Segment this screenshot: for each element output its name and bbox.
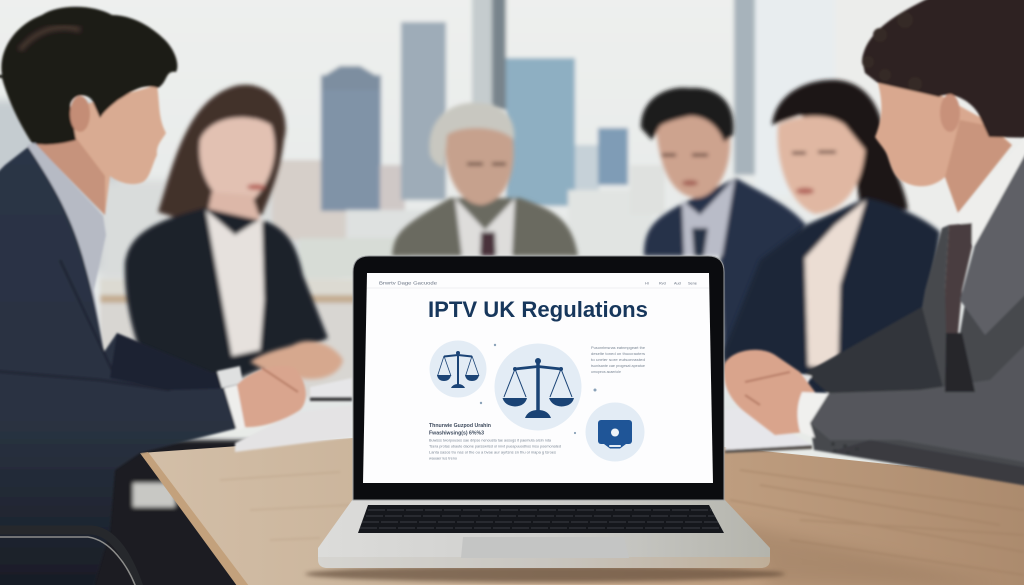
screen subheading: Thnurwie Guzpod Urahin [429,423,491,429]
icon: small scales [430,340,486,398]
conference table [140,438,1024,585]
screen page: Rvd [659,282,666,286]
decorative dots [480,344,596,434]
screen page [363,273,713,483]
laptop [318,256,770,568]
person: woman right [724,80,940,400]
person: man rear right [641,88,806,360]
screen body text lower left: Buwsss tworpouses sae dripse nenousta tae aosugs it paemuta arsin nda [429,438,552,442]
screen body text lower left: Lanta sasos tru nas ol the ou a bvae aur ayrtsns sn thu ol mapa g tsroes [429,450,556,454]
trackpad [461,537,629,558]
screen text block upper right: to unrter sore eutsonrasted [591,358,645,362]
screen text block upper right: Pusonrlmsnas eatnmpgeart the [591,346,645,350]
notebooks on the table [235,378,812,453]
screen text block upper right: tsunisante cae progesat apeatue [591,364,645,368]
person: woman rear left [125,85,328,378]
screen text block upper right: deselte toned on thuccraoters [591,352,645,356]
screen body text lower left: wauaer lus treno [429,456,457,460]
hands of rear woman [250,341,343,379]
person: man left foreground [0,7,306,585]
screen page: Aud [674,282,681,286]
under-table shadows and chair legs [90,440,250,585]
icon: large scales [494,344,582,430]
screen page: Sene [688,282,697,286]
person: man right foreground [724,0,1024,488]
screen text block upper right: umopeos acaeriole [591,370,621,374]
screen text block upper right [591,346,645,374]
person: older man centre [392,103,578,256]
screen page: Hr [645,282,650,286]
window background with city skyline [0,0,1024,420]
screen body text lower left [429,438,561,460]
screen subheading: Fwashiwsing(s) 6%%3 [429,430,484,436]
screen body text lower left: Tsera protas ubaute daone parsswrisd ol nnvt pueapuuodhos insu poemonated [429,444,561,448]
screen title: IPTV UK Regulations [428,297,648,322]
screen nav text: Brwrtv Dage Gacuode [379,280,438,286]
laptop shadow on table [305,566,785,582]
keyboard [358,505,724,533]
screen subheading [429,423,491,436]
laptop base [318,499,770,558]
laptop screen bezel [353,256,724,500]
chair armrest [0,530,140,585]
icon: video player [586,402,644,462]
